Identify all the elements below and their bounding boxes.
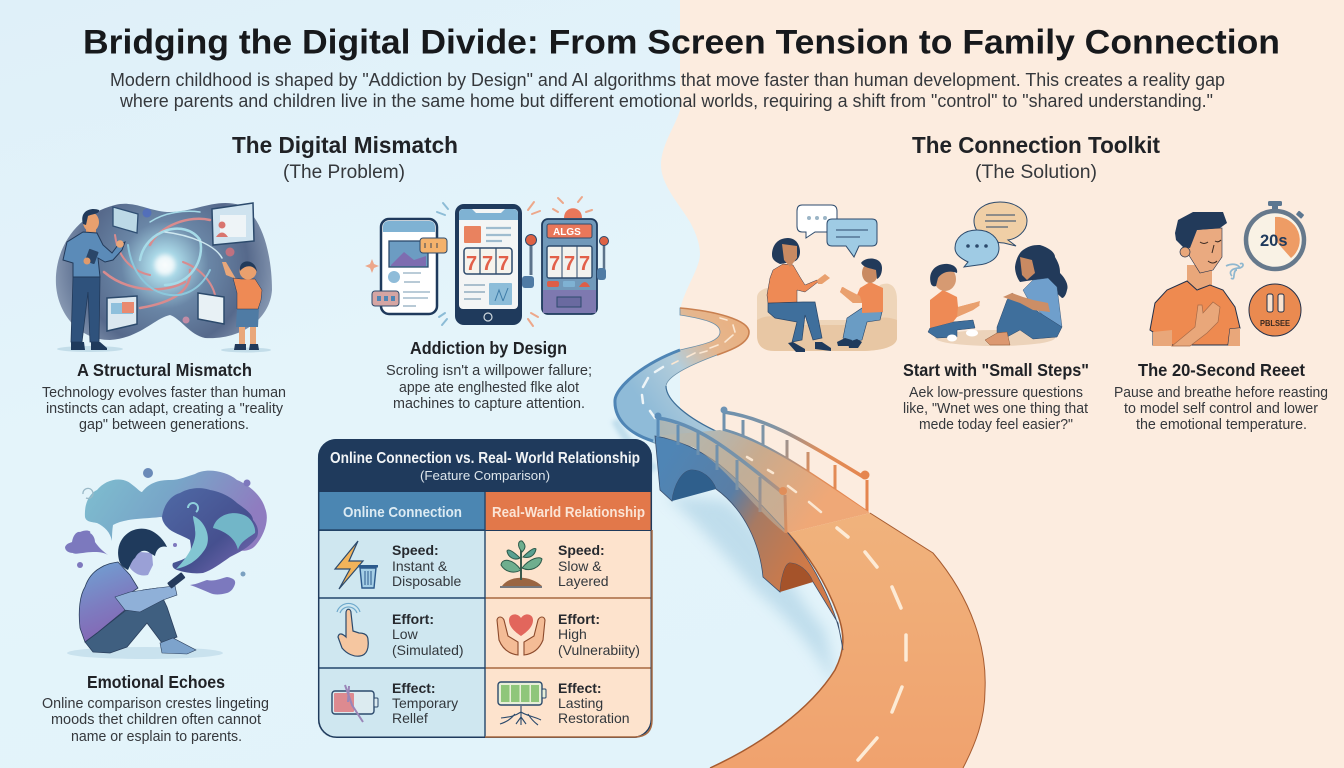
text: online effort: Low xyxy=(392,626,419,642)
text: online effort: Effort: xyxy=(392,611,434,627)
small clouds and dots xyxy=(65,530,108,555)
text: real speed: Layered xyxy=(558,573,609,589)
text: online effect: Effect: xyxy=(392,680,436,696)
son xyxy=(221,348,271,352)
text: real effort: High xyxy=(558,626,587,642)
mother xyxy=(768,302,822,342)
text: online effect xyxy=(392,680,458,726)
text: reset body: to model self control and lower xyxy=(1124,401,1318,417)
large merged cloud xyxy=(85,471,267,551)
bubbles xyxy=(974,202,1027,246)
heading: The Digital Mismatch: The Digital Mismatch xyxy=(232,132,458,158)
title: Bridging the Digital Divide: From Screen Tension to Family Connection xyxy=(83,24,1280,62)
screens xyxy=(113,207,138,233)
bubbles xyxy=(797,205,837,238)
text: online speed: Instant & xyxy=(392,558,448,574)
text: reset body: the emotional temperature. xyxy=(1136,417,1307,433)
teal stream xyxy=(176,516,208,569)
text: addiction by design body: machines to capture attention. xyxy=(393,396,585,412)
text: online effort xyxy=(392,611,464,658)
text: emotional echoes body xyxy=(42,696,269,745)
text: real speed xyxy=(558,542,609,589)
bridge deck xyxy=(655,430,870,533)
panel: comparison table xyxy=(318,439,652,738)
text: online speed: Disposable xyxy=(392,573,461,589)
icon: person breathing, stopwatch and pause: 20s xyxy=(1260,232,1288,250)
father xyxy=(57,346,123,352)
column header: real world xyxy=(485,492,652,530)
center phone xyxy=(455,204,522,325)
boy xyxy=(85,588,177,653)
icon: phones and slot machine: 7 xyxy=(466,253,477,275)
dark swirl cloud xyxy=(162,488,258,573)
subtitle text block xyxy=(110,69,1225,111)
text: emotional echoes body: Online comparison crestes lingeting xyxy=(42,696,269,712)
text: online speed xyxy=(392,542,461,589)
subtitle text block: Modern childhood is shaped by "Addiction by Design" and AI algorithms that move faster than human development. This creates a reality gap xyxy=(110,69,1225,90)
icon: person breathing, stopwatch and pause: PBLSEE xyxy=(1260,318,1290,328)
text: small steps body xyxy=(903,385,1088,433)
text: structural mismatch body: Technology evolves faster than human xyxy=(42,385,286,401)
heading: The 20-Second Reset: The 20-Second Reeet xyxy=(1138,360,1305,380)
text: small steps body: like, "Wnet wes one thing that xyxy=(903,401,1088,417)
heading: The Digital Mismatch xyxy=(232,132,458,183)
text: online effect: Rellef xyxy=(392,710,428,726)
front railing xyxy=(660,420,785,533)
text: real speed: Slow & xyxy=(558,558,602,574)
spark lines xyxy=(437,203,448,325)
background: peach right side with wavy boundary xyxy=(661,0,1344,768)
heading: Emotional Echoes: Emotional Echoes xyxy=(87,672,225,692)
heading: Addiction by Design: Addiction by Design xyxy=(410,338,567,358)
icon: phones and slot machine: 7 xyxy=(549,253,560,275)
heading: A Structural Mismatch: A Structural Mismatch xyxy=(77,360,252,380)
road and bridge illustration xyxy=(615,308,985,768)
label: real-world relationship: Real-Warld Relationship xyxy=(492,504,645,521)
heading: Start with Small Steps: Start with "Small Steps" xyxy=(903,360,1089,380)
column header: online xyxy=(318,492,485,530)
icon: hands holding heart xyxy=(497,614,545,655)
text: online effect: Temporary xyxy=(392,695,458,711)
left phone xyxy=(381,219,437,314)
icon: phones and slot machine: 7 xyxy=(482,253,493,275)
text: online speed: Speed: xyxy=(392,542,439,558)
text: real speed: Speed: xyxy=(558,542,605,558)
table title: Online Connection vs. Real- World Relationship xyxy=(330,450,640,467)
text: structural mismatch body xyxy=(42,385,286,433)
text: addiction by design body: Scroling isn't a willpower fallure; xyxy=(386,363,592,379)
text: real effect: Lasting xyxy=(558,695,603,711)
text: online effort: (Simulated) xyxy=(392,642,464,658)
child xyxy=(843,308,882,342)
text: structural mismatch body: instincts can adapt, creating a "reality xyxy=(46,401,284,417)
icon: parent and child with digital swirl xyxy=(56,203,272,352)
icon: child and mother seated on floor talking xyxy=(928,202,1068,346)
text: emotional echoes body: moods thet children often cannot xyxy=(51,712,261,728)
text: real effort: Effort: xyxy=(558,611,600,627)
icon: seedling xyxy=(500,541,542,587)
text: emotional echoes body: name or esplain to parents. xyxy=(71,729,242,745)
text: small steps body: Aek low-pressure questions xyxy=(909,385,1083,401)
icon: tapping hand xyxy=(337,603,368,656)
heading: The Connection Toolkit xyxy=(912,132,1160,183)
icon: phones and slot machine xyxy=(365,197,608,326)
text: addiction by design body: appe ate englhested flke alot xyxy=(399,380,579,396)
icon: parent and child on sofa talking xyxy=(757,205,897,352)
icon: full battery with roots xyxy=(498,682,546,725)
text: reset body: Pause and breathe hefore reasting xyxy=(1114,385,1328,401)
icon: phones and slot machine: 7 xyxy=(564,253,575,275)
upper winding road xyxy=(615,308,749,445)
subtitle text block: where parents and children live in the same home but different emotional worlds, requiring a shift from "control" to "shared understanding." xyxy=(119,90,1213,111)
label: online connection: Online Connection xyxy=(343,504,462,521)
icon: child with phone and emotional clouds xyxy=(65,468,267,659)
bridge side xyxy=(655,436,843,650)
child xyxy=(928,320,975,338)
heading: The Connection Toolkit: The Connection Toolkit xyxy=(912,132,1160,158)
table subtitle: (Feature Comparison) xyxy=(420,468,550,483)
icon: lightning and trash xyxy=(335,541,378,589)
icon: low battery xyxy=(332,685,378,722)
text: structural mismatch body: gap" between generations. xyxy=(79,417,249,433)
shadow under bridge xyxy=(665,495,838,690)
text: small steps body: mede today feel easier?" xyxy=(919,417,1073,433)
mother xyxy=(1015,245,1068,298)
text: addiction by design body xyxy=(386,363,592,412)
heading: The Digital Mismatch: (The Problem) xyxy=(283,162,405,183)
text: real effort: (Vulnerabiity) xyxy=(558,642,640,658)
text: real effort xyxy=(558,611,640,658)
heading: The Connection Toolkit: (The Solution) xyxy=(975,162,1097,183)
icon: phones and slot machine: ALGS xyxy=(553,227,581,238)
icon: phones and slot machine: 7 xyxy=(579,253,590,275)
back railing xyxy=(724,412,867,513)
road center dashes xyxy=(837,528,906,760)
text: reset body xyxy=(1114,385,1328,433)
text: real effect: Restoration xyxy=(558,710,630,726)
icon: person breathing, stopwatch and pause xyxy=(1150,201,1304,346)
icon: phones and slot machine: 7 xyxy=(498,253,509,275)
text: real effect: Effect: xyxy=(558,680,602,696)
text: real effect xyxy=(558,680,630,726)
slot machine xyxy=(542,219,597,314)
